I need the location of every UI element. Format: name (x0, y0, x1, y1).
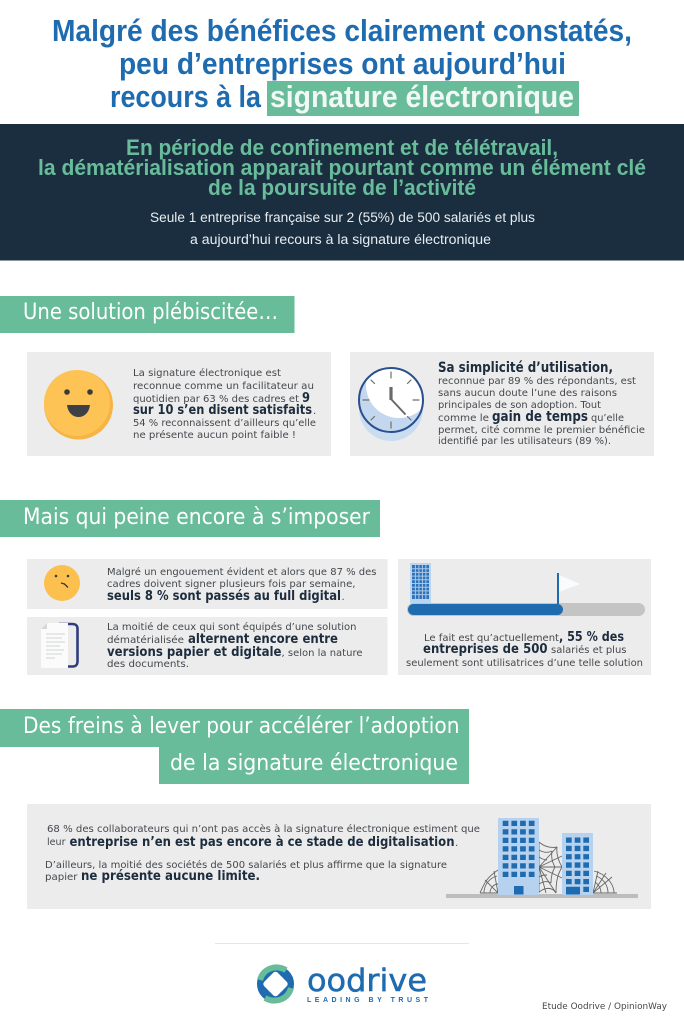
55 percent text: salariés et plus (551, 644, 626, 656)
paper and digital text: , selon la nature (282, 648, 362, 659)
simplicity text: Sa simplicité d’utilisation, (438, 360, 613, 376)
simplicity text: comme le (438, 413, 489, 424)
simplicity text: sans aucun doute l’une des raisons (438, 388, 617, 399)
intro heading: de la poursuite de l’activité (208, 175, 476, 200)
obstacles text: D’ailleurs, la moitié des sociétés de 500 salariés et plus affirme que la signature (45, 859, 447, 871)
obstacles text (45, 823, 480, 884)
full digital text (107, 566, 376, 604)
logo: oodrive: oodrive (307, 963, 427, 999)
satisfaction text: La signature électronique est (133, 367, 281, 379)
satisfaction text (133, 367, 316, 441)
intro text: a aujourd’hui recours à la signature électronique (190, 232, 491, 247)
55 percent text: Le fait est qu’actuellement (424, 633, 559, 644)
title: peu d’entreprises ont aujourd’hui (119, 47, 566, 81)
panel: full digital (27, 559, 388, 609)
heading: des freins à lever (0, 709, 469, 784)
obstacles text: . (455, 838, 458, 849)
panel: paper and digital (27, 617, 388, 675)
simplicity text: gain de temps (492, 409, 588, 425)
panel: simplicity (350, 352, 654, 456)
icon: buildings with cobwebs (446, 818, 638, 898)
panel: satisfaction (27, 352, 331, 456)
icon: document (41, 623, 78, 668)
simplicity text: principales de son adoption. Tout (438, 400, 601, 411)
simplicity text: reconnue par 89 % des répondants, est (438, 375, 636, 387)
logo mark (260, 967, 291, 1001)
simplicity text: permet, cité comme le premier bénéficie (438, 424, 645, 436)
full digital text: . (342, 592, 345, 603)
heading: une solution plébiscitée: Une solution plébiscitée… (23, 300, 278, 325)
satisfaction text: sur 10 s’en disent satisfaits (133, 402, 312, 418)
simplicity text: qu’elle (591, 413, 624, 424)
satisfaction text: reconnue comme un facilitateur au (133, 381, 314, 392)
panel: intro band (0, 124, 684, 260)
full digital text: seuls 8 % sont passés au full digital (107, 588, 341, 604)
satisfaction text: ne présente aucun point faible ! (133, 429, 296, 441)
simplicity text: identifié par les utilisateurs (89 %). (438, 435, 611, 447)
paper and digital text: La moitié de ceux qui sont équipés d’une solution (107, 621, 356, 633)
intro heading: la dématérialisation apparait pourtant comme un élément clé (38, 155, 646, 180)
heading: une solution plébiscitée (0, 296, 294, 333)
logo: oodrive: LEADING BY TRUST (307, 997, 429, 1004)
icon: flag (557, 573, 580, 604)
full digital text: cadres doivent signer plusieurs fois par semaine, (107, 579, 356, 590)
heading: des freins à lever: Des freins à lever pour accélérer l’adoption (23, 714, 460, 739)
progress bar (407, 603, 645, 616)
heading: mais qui peine encore: Mais qui peine encore à s’imposer (23, 505, 371, 530)
obstacles text: leur (47, 837, 66, 848)
full digital text: Malgré un engouement évident et alors que 87 % des (107, 566, 376, 578)
paper and digital text: des documents. (107, 659, 189, 670)
heading: des freins à lever: de la signature électronique (170, 751, 458, 776)
satisfaction text: . (313, 406, 316, 417)
obstacles text: entreprise n’en est pas encore à ce stade de digitalisation (70, 834, 454, 850)
55 percent text: seulement sont utilisatrices d’une telle solution (406, 658, 643, 669)
paper and digital text: versions papier et digitale (107, 644, 282, 660)
satisfaction text: 9 (302, 390, 310, 406)
title: signature électronique (270, 80, 574, 114)
paper and digital text: alternent encore entre (188, 631, 338, 647)
obstacles text: ne présente aucune limite. (81, 868, 260, 884)
icon: doubtful face (44, 565, 80, 601)
title: Malgré des bénéfices clairement constatés, (52, 14, 632, 48)
satisfaction text: 54 % reconnaissent d’ailleurs qu’elle (133, 418, 316, 429)
heading: mais qui peine encore (0, 500, 380, 537)
obstacles text: 68 % des collaborateurs qui n’ont pas accès à la signature électronique estiment que (47, 823, 480, 835)
title (52, 14, 632, 116)
icon: smiling face (44, 370, 113, 440)
panel: obstacles (27, 804, 651, 909)
intro text: Seule 1 entreprise française sur 2 (55%) de 500 salariés et plus (150, 210, 535, 225)
satisfaction text: quotidien par 63 % des cadres et (133, 394, 299, 405)
intro text (150, 210, 535, 247)
paper and digital text (107, 621, 362, 670)
paper and digital text: dématérialisée (107, 634, 184, 646)
simplicity text (438, 360, 645, 447)
icon: building (410, 563, 431, 603)
intro heading (38, 135, 646, 200)
icon: clock (358, 367, 424, 441)
55 percent text (406, 629, 643, 669)
intro heading: En période de confinement et de télétravail, (126, 135, 558, 160)
55 percent text: entreprises de 500 (423, 641, 548, 657)
obstacles text: papier (45, 872, 78, 883)
logo: oodrive (260, 963, 429, 1004)
title: recours à la (110, 80, 262, 114)
panel: 55 percent (398, 559, 651, 675)
source note: Etude Oodrive / OpinionWay (542, 1002, 667, 1012)
55 percent text: , 55 % des (559, 629, 624, 645)
